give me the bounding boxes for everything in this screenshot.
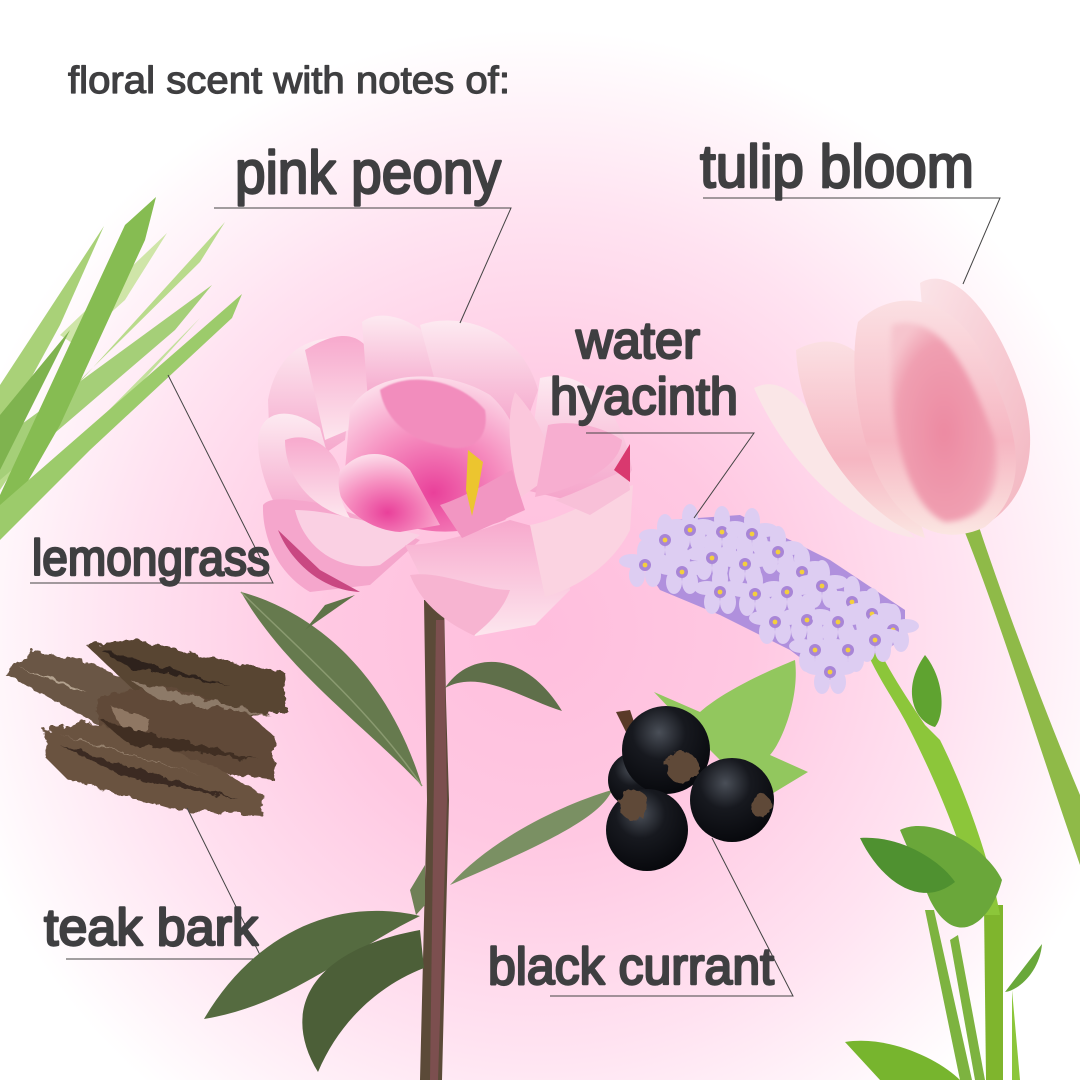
label: water hyacinth: water <box>575 312 700 370</box>
title: floral scent with notes of: <box>68 60 510 102</box>
illustration: teak bark <box>2 638 288 816</box>
label: water hyacinth: hyacinth <box>550 368 738 426</box>
label: teak bark: teak bark <box>44 899 259 957</box>
illustration: black currant <box>606 660 808 871</box>
illustration: hyacinth plant <box>845 640 1042 1080</box>
callout line: pink peony <box>214 208 511 323</box>
illustration: tulip <box>754 279 1080 865</box>
callout line: black currant <box>550 838 793 996</box>
callout line: lemongrass <box>30 375 273 583</box>
illustration: pink peony <box>258 316 633 636</box>
callout line: teak bark <box>66 808 262 959</box>
label: black currant: black currant <box>488 938 775 996</box>
illustration: hyacinth flowers <box>619 504 919 694</box>
label: tulip bloom: tulip bloom <box>700 133 974 200</box>
illustration: lemongrass <box>0 197 242 540</box>
label: lemongrass: lemongrass <box>32 530 270 586</box>
callout line: tulip bloom <box>703 198 1000 284</box>
callout line: water hyacinth <box>586 433 754 518</box>
illustration: peony stem and leaves <box>204 592 612 1080</box>
label: pink peony: pink peony <box>235 139 501 206</box>
